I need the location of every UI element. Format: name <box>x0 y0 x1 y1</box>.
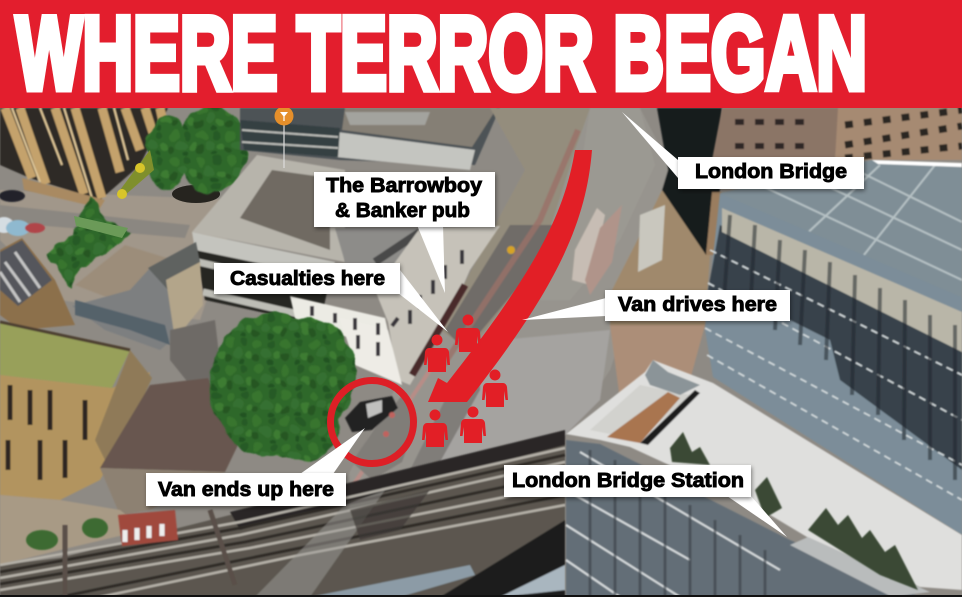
van crash site <box>345 392 417 480</box>
casualty figure 4 <box>422 410 448 447</box>
cars on the left street <box>0 190 45 236</box>
callout: London Bridge Station <box>504 465 787 537</box>
building: stone church roofs left <box>0 238 238 565</box>
icon: orange pub map pin <box>274 106 294 168</box>
building: white pub corner building <box>290 226 500 385</box>
callout: Van ends up here: Van ends up here <box>158 479 334 501</box>
casualty figure 3 <box>482 370 508 407</box>
callout: The Barrowboy & Banker pub: & Banker pub <box>335 200 470 222</box>
casualty figure 1 <box>455 314 481 352</box>
casualty figures <box>422 314 508 447</box>
building: London Bridge Station roof <box>566 360 962 597</box>
building: top-left tan tower <box>0 108 168 208</box>
callout: London Bridge: London Bridge <box>695 161 847 183</box>
callout: Casualties here: Casualties here <box>230 268 385 290</box>
title banner <box>0 0 962 112</box>
tree: large tree by the junction <box>210 313 356 462</box>
casualty figure 2 <box>424 334 450 372</box>
callout: London Bridge Station: London Bridge Station <box>512 470 744 492</box>
road and pavements <box>340 108 722 500</box>
trees: green patch at left <box>46 196 130 290</box>
callout: Van drives here: Van drives here <box>618 294 777 316</box>
van route arrow <box>428 150 592 402</box>
callout: Van drives here <box>522 290 790 321</box>
building: office block with rooftop <box>192 108 500 325</box>
van end location ring <box>330 380 414 464</box>
casualty figure 5 <box>460 406 486 443</box>
callout: Casualties here <box>214 263 448 332</box>
image edges <box>0 595 962 597</box>
ground: left forecourt <box>0 190 240 320</box>
callout: The Barrowboy & Banker pub <box>314 172 495 293</box>
railway lines <box>0 430 565 597</box>
rooftop fir trees on station <box>670 432 918 590</box>
trees: top centre <box>117 106 246 203</box>
callout: London Bridge <box>622 112 864 189</box>
callout: Van ends up here <box>146 428 365 506</box>
building: brick tower top right <box>712 108 962 160</box>
callout: The Barrowboy & Banker pub: The Barrowboy <box>326 175 483 197</box>
building: glass tower right <box>705 160 962 535</box>
